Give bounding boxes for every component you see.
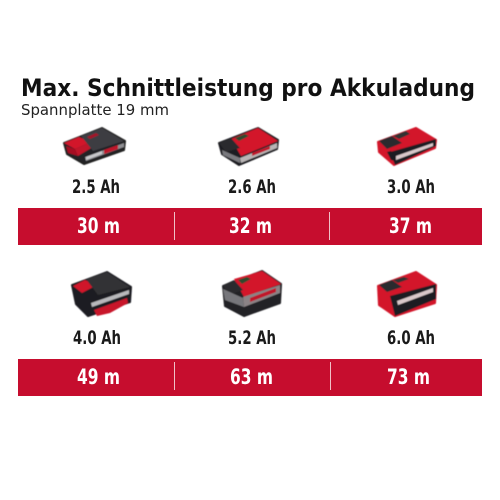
label: 2.5 Ah: 2.5 Ah <box>72 176 120 198</box>
label: 4.0 Ah: 4.0 Ah <box>73 327 121 349</box>
icon: battery 4.0 Ah <box>72 272 131 316</box>
value: 37 m: 37 m <box>389 214 432 238</box>
bar: row 2 results <box>18 359 482 396</box>
value: 49 m: 49 m <box>77 365 120 389</box>
icon: battery 5.2 Ah <box>223 271 281 316</box>
label: 2.6 Ah: 2.6 Ah <box>228 176 276 198</box>
bar: row 1 results <box>18 208 482 245</box>
subtitle: Spannplatte 19 mm <box>21 101 169 119</box>
icon: battery 2.6 Ah <box>219 128 278 165</box>
icon: battery 6.0 Ah <box>378 272 436 316</box>
value: 73 m: 73 m <box>387 365 430 389</box>
label: 6.0 Ah: 6.0 Ah <box>387 327 435 349</box>
value: 63 m: 63 m <box>230 365 273 389</box>
value: 30 m: 30 m <box>77 214 120 238</box>
icon: battery 3.0 Ah <box>378 128 436 165</box>
value: 32 m: 32 m <box>229 214 272 238</box>
label: 3.0 Ah: 3.0 Ah <box>387 176 435 198</box>
icon: battery 2.5 Ah <box>64 128 125 164</box>
label: 5.2 Ah: 5.2 Ah <box>228 327 276 349</box>
